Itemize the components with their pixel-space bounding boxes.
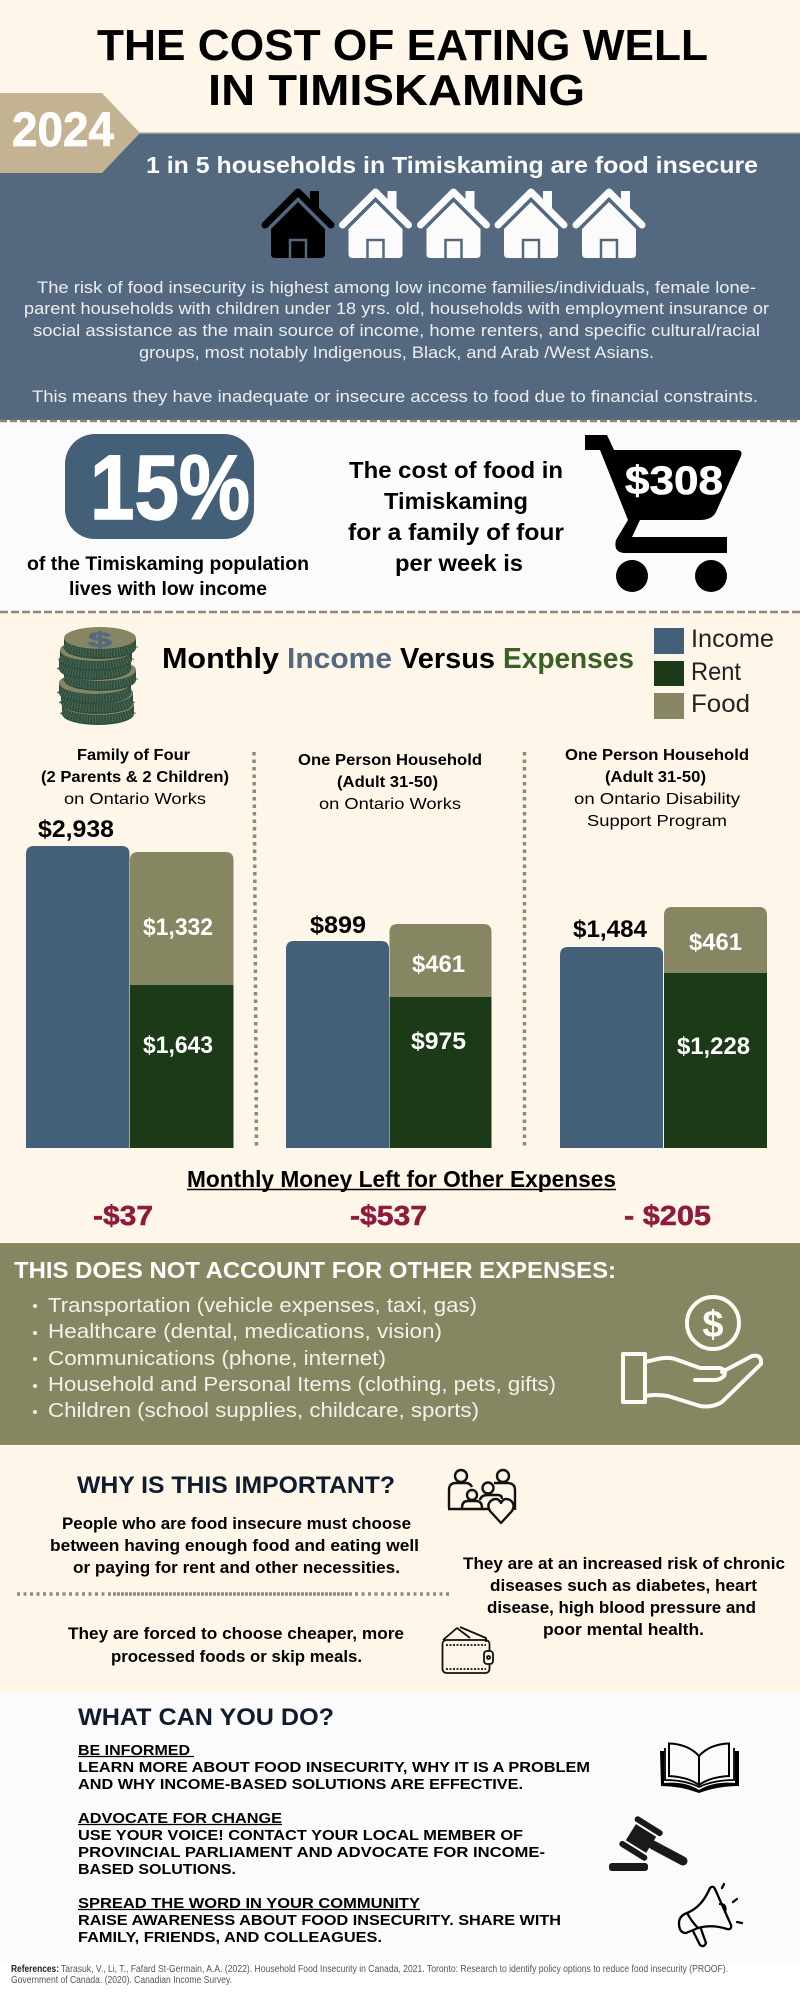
bar chart: one person ontario works (286, 912, 492, 1148)
heading: monthly income versus expenses: Expenses (503, 643, 634, 675)
column heading: family of four (41, 747, 229, 808)
text block: food insecurity risk: This means they have inadequate or insecure access to food due to financial constraints. (32, 388, 758, 406)
money left values: -$537 (350, 1200, 427, 1231)
icon: hand holding coin: $ (702, 1304, 724, 1346)
text block: low income population: lives with low income (69, 579, 267, 600)
icon: gavel (609, 1815, 683, 1871)
text block: food insecurity risk: groups, most notably Indigenous, Black, and Arab /West Asians. (139, 344, 654, 362)
text block: cost of food: Timiskaming (384, 488, 528, 514)
text block: chronic disease risk (463, 1554, 785, 1639)
icon: open book (660, 1744, 739, 1793)
action: spread the word (78, 1896, 561, 1946)
text block: food insecurity risk: parent households with children under 18 yrs. old, households with employment insurance or (24, 300, 770, 318)
money left values: - $205 (624, 1200, 711, 1231)
icon: megaphone (679, 1884, 742, 1946)
text block: choose food or rent: or paying for rent and other necessities. (73, 1558, 400, 1577)
text block: cheaper foods (68, 1624, 404, 1666)
bar chart: one person disability: $1,228 (677, 1033, 750, 1060)
text block: chronic disease risk: disease, high blood pressure and (487, 1598, 756, 1617)
column heading: family of four: on Ontario Works (64, 791, 206, 808)
column heading: one person ontario works (298, 752, 482, 813)
action: advocate for change (78, 1811, 545, 1878)
bar chart: one person ontario works: $461 (412, 951, 465, 978)
list: other expenses: Household and Personal Items (clothing, pets, gifts) (48, 1374, 556, 1396)
list: other expenses (33, 1295, 556, 1422)
title: IN TIMISKAMING (208, 67, 585, 115)
bar chart: one person disability (560, 907, 767, 1148)
icon: family with heart (448, 1470, 515, 1523)
heading: monthly money left: Monthly Money Left for Other Expenses (187, 1166, 616, 1192)
bar chart: one person disability: $1,484 (573, 916, 648, 943)
legend: Income (691, 625, 774, 653)
text block: cost of food: for a family of four (348, 519, 564, 545)
icon: coin stack (59, 627, 136, 725)
column heading: one person ontario disability: (Adult 31-50) (605, 769, 706, 786)
heading: monthly income versus expenses: Income (287, 643, 392, 675)
action: spread the word: SPREAD THE WORD IN YOUR COMMUNITY (78, 1896, 420, 1912)
bar chart: one person ontario works: $899 (310, 912, 366, 939)
text block: choose food or rent: between having enough food and eating well (50, 1536, 419, 1555)
heading: other expenses: THIS DOES NOT ACCOUNT FOR OTHER EXPENSES: (14, 1257, 616, 1283)
column heading: one person ontario disability: on Ontario Disability (574, 791, 740, 808)
references (11, 1964, 728, 1986)
panel: other expenses (0, 1243, 800, 1445)
text block: chronic disease risk: diseases such as diabetes, heart (490, 1576, 757, 1595)
text block: low income population: of the Timiskaming population (27, 554, 309, 575)
heading: monthly income versus expenses: Versus (400, 643, 495, 675)
text block: food insecurity risk (24, 279, 770, 406)
money left values (93, 1200, 711, 1231)
action: be informed (78, 1743, 590, 1793)
text block: chronic disease risk: poor mental health. (543, 1620, 704, 1639)
money left values: -$37 (93, 1200, 153, 1231)
legend (654, 625, 774, 719)
bar chart: family of four (26, 816, 234, 1148)
badge: 2024: 2024 (12, 104, 114, 157)
legend: Food (691, 690, 750, 718)
column heading: one person ontario disability (565, 747, 749, 830)
references: References: (11, 1964, 59, 1975)
action: advocate for change: PROVINCIAL PARLIAMENT AND ADVOCATE FOR INCOME- (78, 1845, 545, 1861)
action: be informed: LEARN MORE ABOUT FOOD INSECURITY, WHY IT IS A PROBLEM (78, 1760, 590, 1776)
text block: cost of food: The cost of food in (349, 457, 563, 483)
text block: choose food or rent: People who are food insecure must choose (62, 1514, 411, 1533)
text block: choose food or rent (50, 1514, 419, 1577)
column heading: one person ontario works: on Ontario Works (319, 796, 461, 813)
references: Government of Canada. (2020). Canadian Income Survey. (11, 1975, 232, 1986)
bar chart: family of four: $2,938 (38, 816, 114, 843)
text block: food insecurity risk: social assistance as the main source of income, home renters, and specific cultural/racial (33, 322, 760, 340)
column heading: one person ontario works: (Adult 31-50) (337, 774, 438, 791)
legend: Rent (691, 658, 741, 686)
text block: cost of food: per week is (395, 550, 523, 576)
action: be informed: BE INFORMED (78, 1743, 190, 1759)
panel: low income and food cost (0, 421, 800, 612)
heading: 1 in 5 households: 1 in 5 households in Timiskaming are food insecure (146, 152, 758, 178)
icon: house row, 1 of 5 dark (265, 191, 642, 258)
text block: low income population (27, 554, 309, 600)
icon: coin stack: $ (88, 629, 113, 652)
bar chart: one person disability: $461 (689, 929, 742, 956)
action: be informed: AND WHY INCOME-BASED SOLUTIONS ARE EFFECTIVE. (78, 1777, 523, 1793)
list: other expenses: Healthcare (dental, medications, vision) (48, 1321, 442, 1343)
bar chart: family of four: $1,643 (143, 1032, 213, 1059)
column heading: one person ontario disability: One Person Household (565, 747, 749, 764)
references bottom strip (0, 1962, 800, 2000)
heading: why is this important: WHY IS THIS IMPORTANT? (77, 1472, 395, 1499)
text block: food insecurity risk: The risk of food insecurity is highest among low income families/individuals, female lone- (37, 279, 756, 297)
column heading: one person ontario disability: Support Program (587, 813, 727, 830)
list: other expenses: Transportation (vehicle expenses, taxi, gas) (48, 1295, 477, 1317)
column heading: one person ontario works: One Person Household (298, 752, 482, 769)
stat: 15%: 15% (90, 437, 250, 539)
bar chart: one person ontario works: $975 (411, 1028, 466, 1055)
text block: cost of food (348, 457, 564, 576)
action: advocate for change: BASED SOLUTIONS. (78, 1862, 236, 1878)
title: THE COST OF EATING WELL (97, 22, 708, 70)
column heading: family of four: Family of Four (77, 747, 190, 764)
text block: cheaper foods: processed foods or skip meals. (111, 1647, 362, 1666)
panel: food insecurity (0, 132, 800, 420)
badge: 2024 (0, 93, 140, 173)
column heading: family of four: (2 Parents & 2 Children) (41, 769, 229, 786)
text block: cheaper foods: They are forced to choose cheaper, more (68, 1624, 404, 1643)
heading: what can you do: WHAT CAN YOU DO? (78, 1704, 334, 1731)
icon: hand holding coin (623, 1297, 761, 1406)
bar chart: family of four: $1,332 (143, 914, 213, 941)
text block: chronic disease risk: They are at an increased risk of chronic (463, 1554, 785, 1573)
icon: shopping cart with $308: $308 (625, 459, 723, 503)
action: advocate for change: USE YOUR VOICE! CONTACT YOUR LOCAL MEMBER OF (78, 1828, 523, 1844)
action: advocate for change: ADVOCATE FOR CHANGE (78, 1811, 282, 1827)
title (97, 22, 708, 115)
icon: wallet (442, 1627, 493, 1673)
list: other expenses: Communications (phone, internet) (48, 1348, 386, 1370)
heading: monthly income versus expenses: Monthly (162, 643, 279, 675)
action: spread the word: FAMILY, FRIENDS, AND COLLEAGUES. (78, 1930, 382, 1946)
panel: what can you do (0, 1692, 800, 1962)
list: other expenses: Children (school supplies, childcare, sports) (48, 1400, 479, 1422)
icon: shopping cart with $308 (585, 435, 742, 592)
action: spread the word: RAISE AWARENESS ABOUT FOOD INSECURITY. SHARE WITH (78, 1913, 561, 1929)
heading: monthly income versus expenses (162, 643, 634, 675)
